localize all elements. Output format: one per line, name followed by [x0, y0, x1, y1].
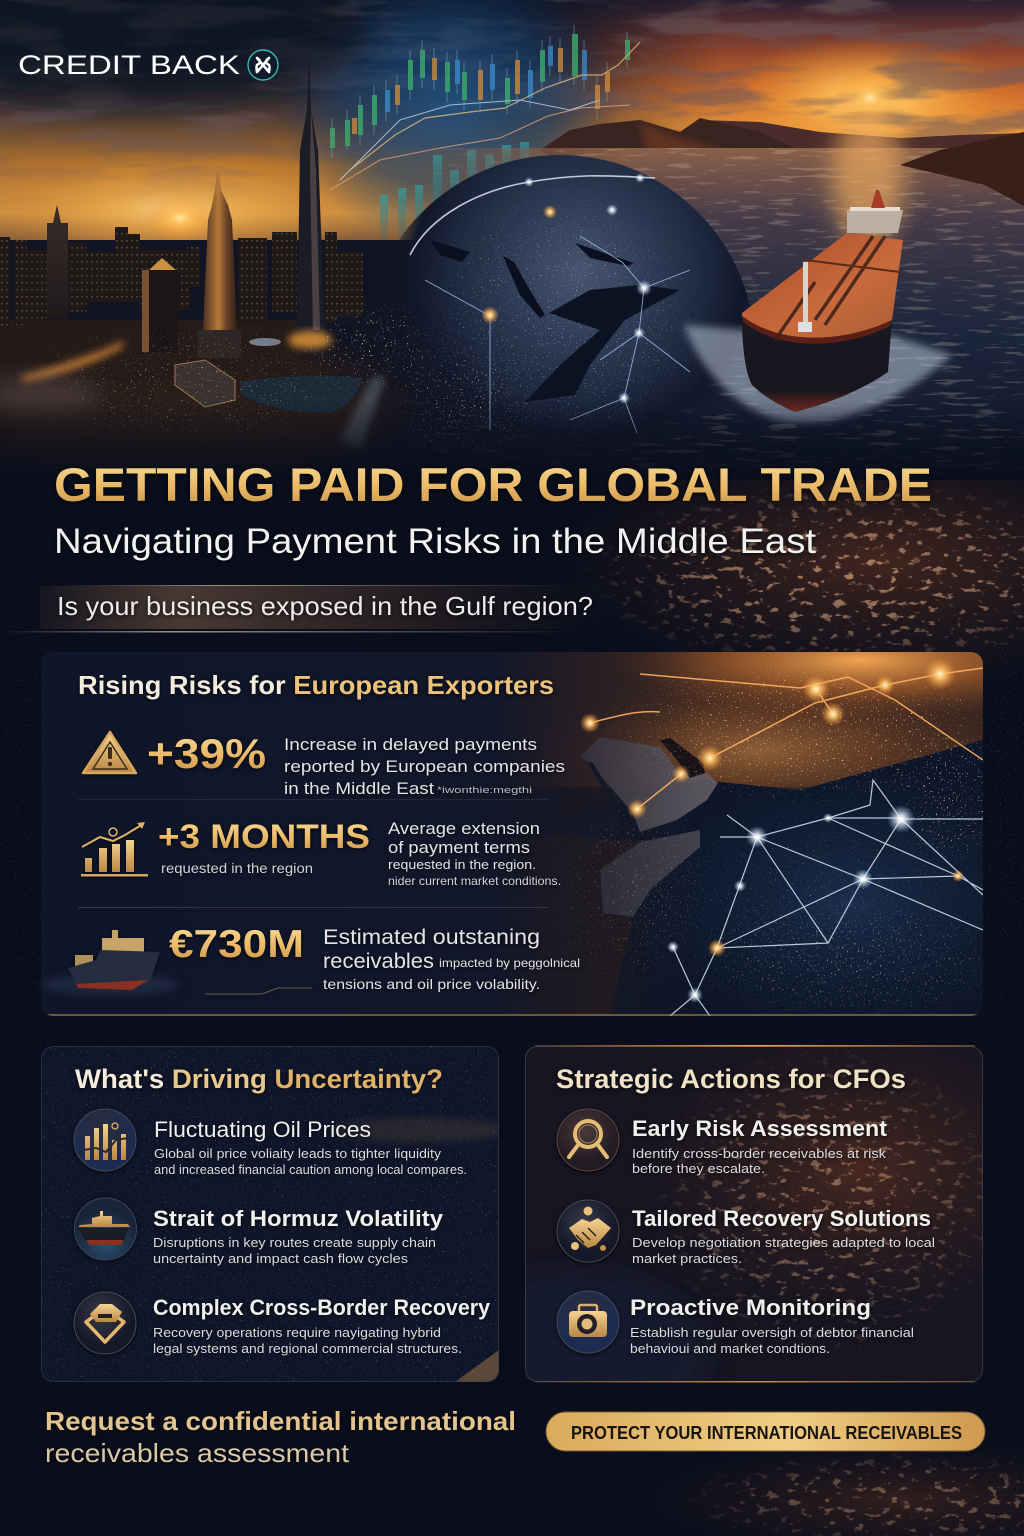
figure: +3 MONTHS	[158, 818, 370, 856]
question banner: Is your business exposed in the Gulf region?	[57, 591, 593, 621]
hero fade into dark	[0, 400, 1024, 480]
description: reported by European companies	[284, 757, 565, 776]
icon: oil price chart	[74, 1109, 136, 1171]
sea	[0, 110, 1024, 480]
question banner	[0, 585, 610, 632]
logo mark	[248, 50, 278, 80]
item: tailored recovery solutions: Tailored Recovery Solutions	[632, 1206, 931, 1231]
item: proactive monitoring: behavioui and market condtions.	[630, 1341, 830, 1356]
description: Estimated outstaning	[323, 926, 540, 949]
item: cross-border recovery: Complex Cross-Border Recovery	[153, 1295, 491, 1320]
panel: strategic actions for CFOs	[525, 1045, 983, 1382]
item: strait of hormuz: Disruptions in key routes create supply chain	[153, 1235, 436, 1250]
icon: warning triangle	[83, 732, 136, 773]
map background	[41, 652, 983, 1016]
call to action text	[45, 1406, 516, 1468]
heading: Strategic Actions for CFOs	[556, 1064, 906, 1094]
item: tailored recovery solutions: market practices.	[632, 1251, 742, 1266]
item: early risk assessment: before they escalate.	[632, 1161, 765, 1176]
icon: handshake	[557, 1200, 619, 1262]
description	[388, 820, 561, 888]
orange trade routes	[590, 668, 983, 809]
description: nider current market conditions.	[388, 874, 561, 888]
blue trade routes	[670, 780, 983, 1016]
description: in the Middle East	[284, 779, 434, 798]
icon: rising bar chart	[81, 822, 148, 876]
caption: requested in the region	[161, 861, 313, 876]
icon: container ship	[40, 930, 180, 997]
item: proactive monitoring: Proactive Monitoring	[630, 1295, 871, 1320]
divider	[78, 799, 548, 800]
candlestick chart	[330, 25, 640, 260]
icon: recovery handshake	[74, 1292, 136, 1354]
panel background	[41, 1046, 510, 1382]
item: oil prices: Global oil price voliaity leads to tighter liquidity	[154, 1146, 442, 1161]
item: proactive monitoring: Establish regular oversigh of debtor financial	[630, 1325, 914, 1340]
panel background	[525, 1046, 983, 1382]
item: early risk assessment	[557, 1109, 888, 1176]
description: impacted by peggolnical	[439, 956, 580, 970]
item: oil prices: and increased financial caution among local compares.	[154, 1162, 467, 1177]
main title: GETTING PAID FOR GLOBAL TRADE	[54, 458, 932, 511]
item: cross-border recovery: Recovery operations require nayigating hybrid	[153, 1325, 441, 1340]
figure: +39%	[147, 730, 266, 777]
item: proactive monitoring	[557, 1291, 914, 1356]
item: cross-border recovery: legal systems and regional commercial structures.	[153, 1341, 462, 1356]
figure: €730M	[169, 923, 304, 966]
city skyline	[0, 57, 437, 454]
item: tailored recovery solutions	[557, 1200, 935, 1266]
description	[284, 735, 565, 798]
panel: rising risks	[40, 652, 983, 1016]
description: of payment terms	[388, 839, 530, 857]
description: *iwonthie:megthi	[437, 785, 532, 796]
sky	[0, 0, 1024, 240]
icon: vessel	[74, 1198, 136, 1260]
stat: +39%	[83, 730, 565, 798]
item: strait of hormuz	[74, 1198, 444, 1266]
hero image: Gulf city, globe, tanker at sunset	[0, 0, 1024, 480]
title block	[54, 458, 932, 561]
item: oil prices	[74, 1109, 467, 1177]
subtitle: Navigating Payment Risks in the Middle East	[54, 522, 816, 561]
CTA button	[546, 1412, 985, 1451]
item: tailored recovery solutions: Develop negotiation strategies adapted to local	[632, 1235, 935, 1250]
icon: monitoring lens	[557, 1291, 619, 1353]
description	[323, 926, 580, 992]
heading: Rising Risks for European Exporters	[78, 670, 554, 700]
item: cross-border recovery	[74, 1292, 491, 1356]
panel: what's driving uncertainty	[41, 1046, 510, 1382]
description: receivables	[323, 950, 434, 973]
icon: magnifier	[557, 1109, 619, 1171]
item: early risk assessment: Early Risk Assessment	[632, 1116, 888, 1141]
item: oil prices: Fluctuating Oil Prices	[154, 1117, 371, 1142]
description: Average extension	[388, 820, 540, 838]
item: strait of hormuz: Strait of Hormuz Volatility	[153, 1206, 444, 1231]
call to action text: receivables assessment	[45, 1438, 350, 1468]
stat: +3 months	[81, 818, 561, 888]
stat: €730M	[40, 923, 580, 997]
item: strait of hormuz: uncertainty and impact cash flow cycles	[153, 1251, 409, 1266]
call to action text: Request a confidential international	[45, 1406, 516, 1436]
description: tensions and oil price volability.	[323, 976, 540, 992]
description: Increase in delayed payments	[284, 735, 537, 754]
globe with Middle East lights	[388, 155, 750, 463]
divider	[78, 907, 548, 908]
logo: Credit Back: CREDIT BACK	[18, 50, 240, 80]
heading: What's Driving Uncertainty?	[75, 1064, 443, 1094]
logo backing shade	[0, 0, 370, 105]
CTA button: PROTECT YOUR INTERNATIONAL RECEIVABLES	[571, 1423, 962, 1443]
logo: Credit Back	[18, 50, 278, 80]
mountains	[540, 118, 1019, 160]
item: early risk assessment: Identify cross-border receivables at risk	[632, 1146, 887, 1161]
description: requested in the region.	[388, 857, 536, 872]
tanker ship	[684, 190, 952, 422]
